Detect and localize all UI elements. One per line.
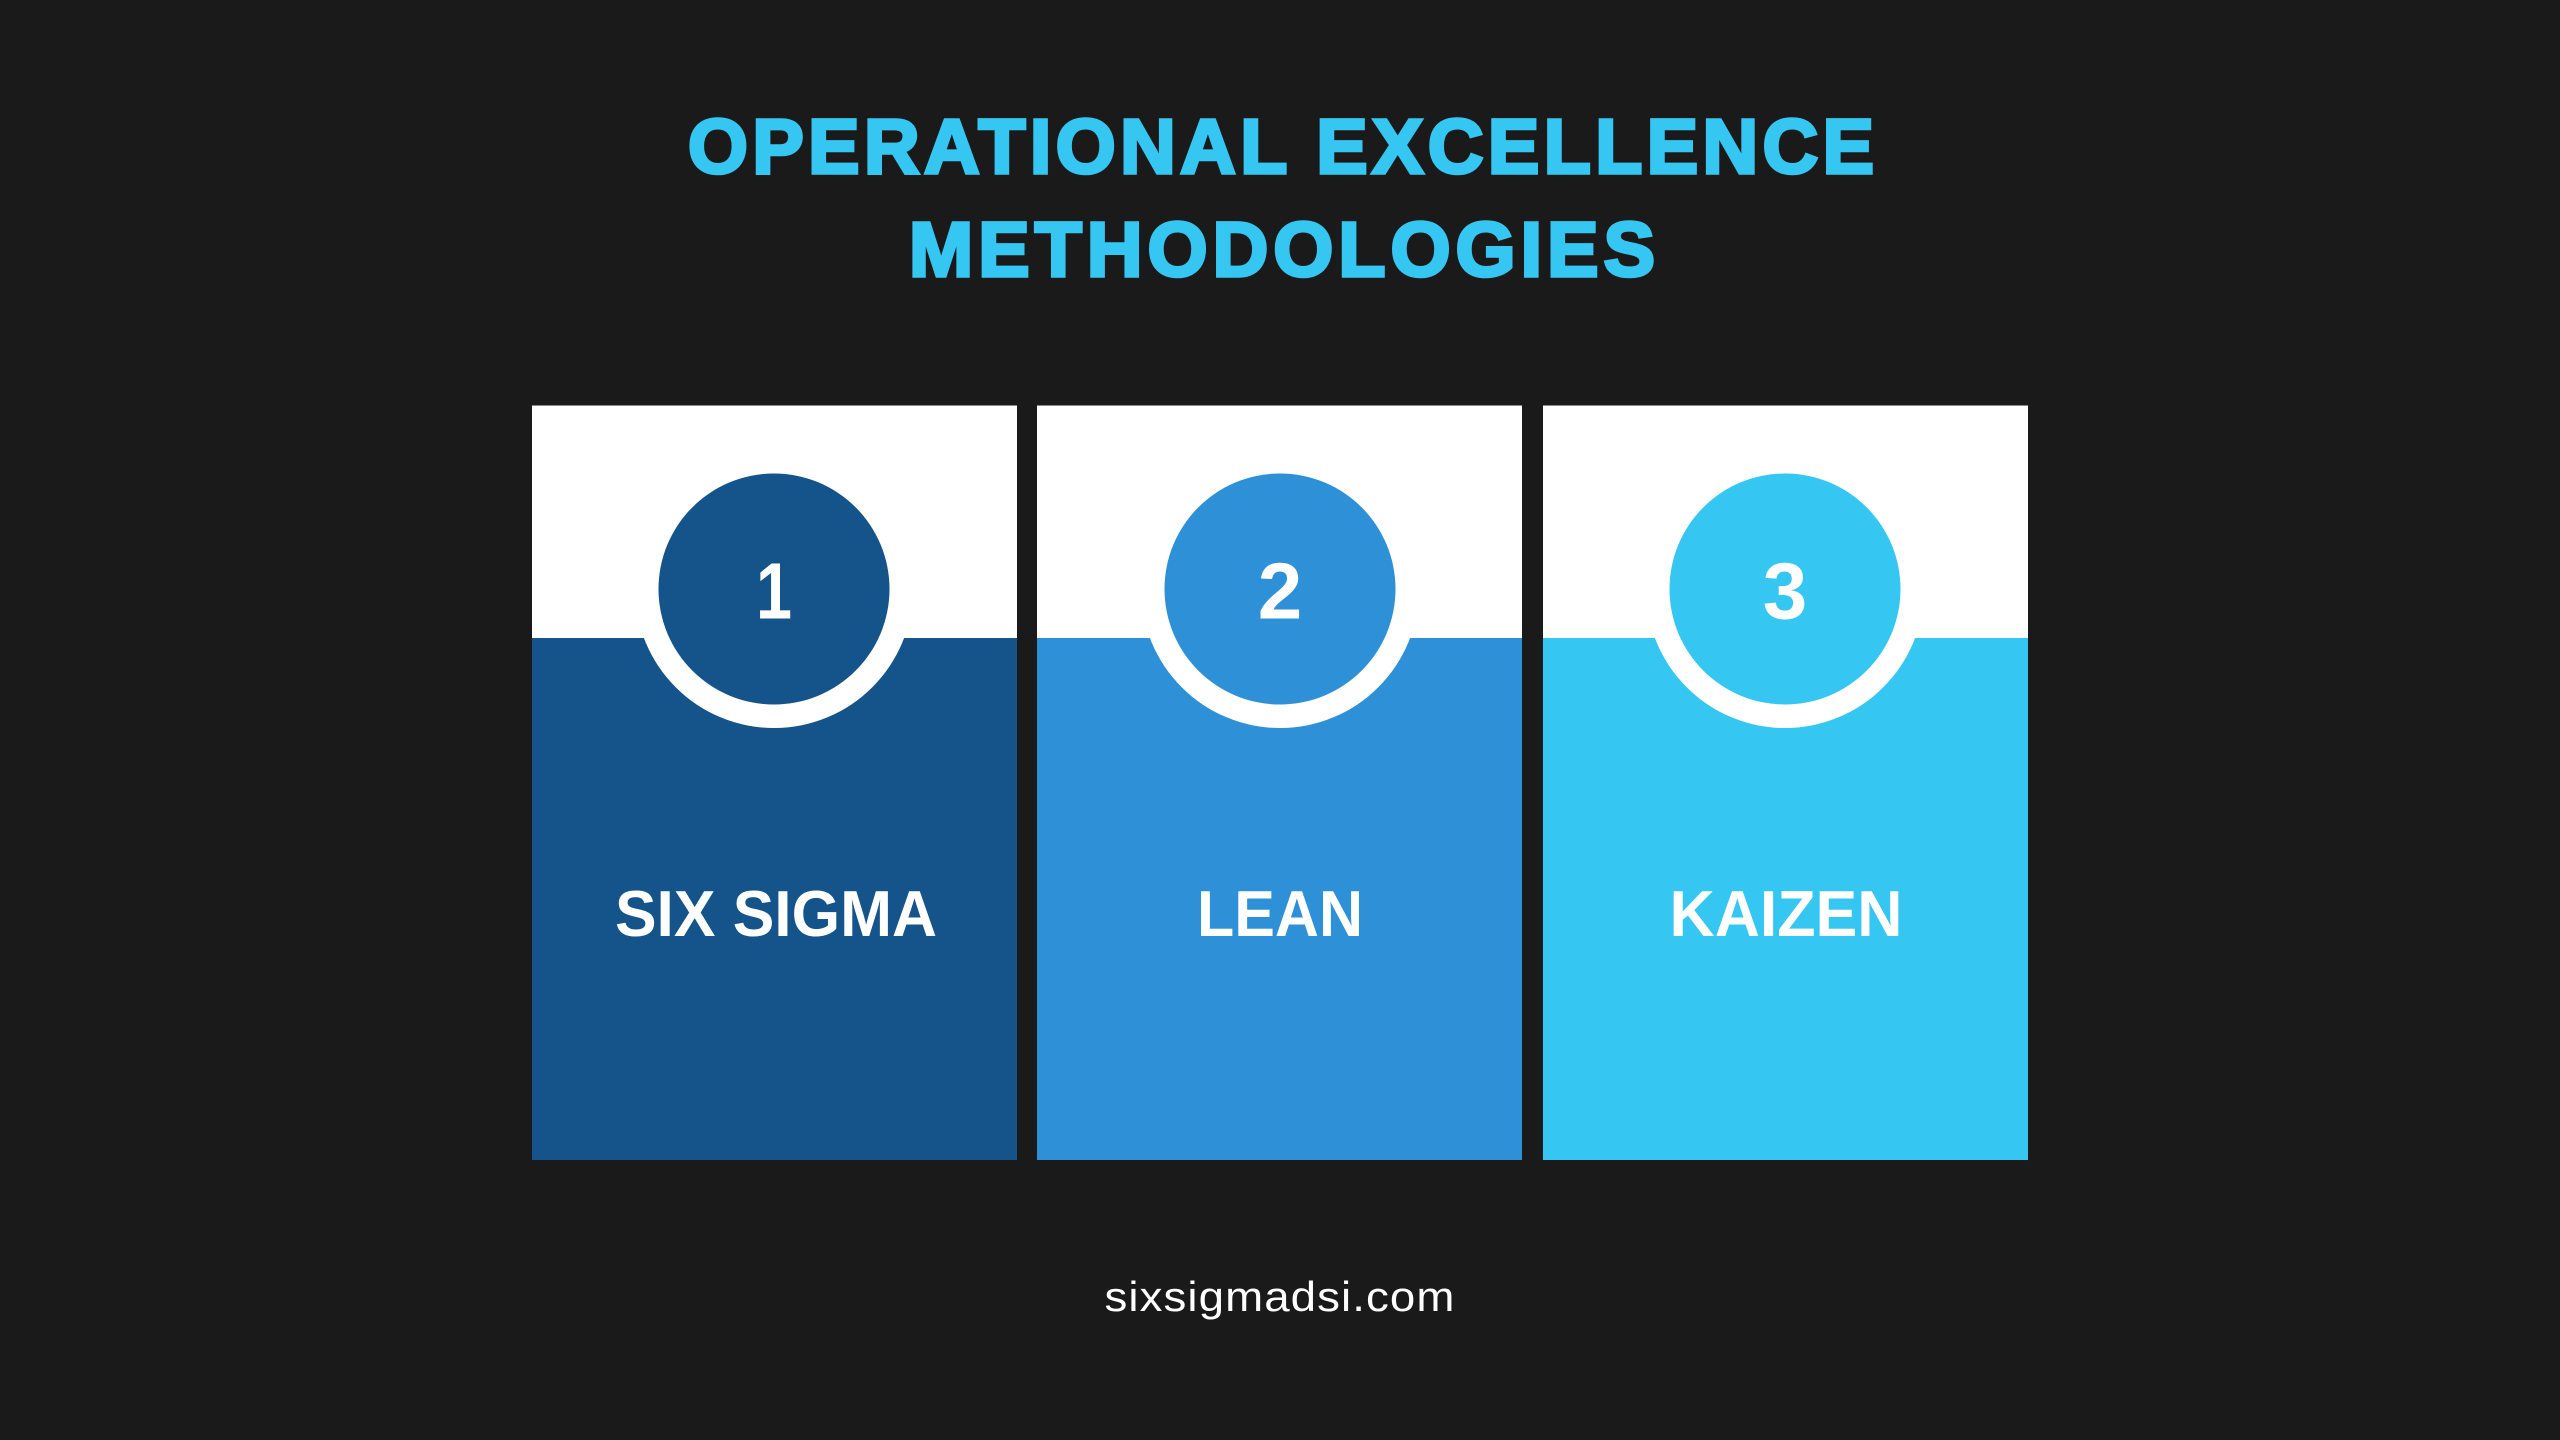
label: kaizen: KAIZEN xyxy=(1670,877,1902,950)
label: lean: LEAN xyxy=(1197,877,1363,950)
label: six sigma: SIX SIGMA xyxy=(615,877,937,950)
title: METHODOLOGIES xyxy=(909,207,1655,293)
badge: number 3 xyxy=(1645,450,1925,728)
panel: six sigma xyxy=(532,406,1017,1160)
panel: lean xyxy=(1037,406,1522,1160)
panel: kaizen xyxy=(1543,406,2028,1160)
badge: number 1 xyxy=(634,450,914,728)
title xyxy=(688,104,1874,293)
footer website: sixsigmadsi.com xyxy=(1104,1273,1456,1320)
badge: number 2: 2 xyxy=(1258,546,1302,636)
badge: number 1: 1 xyxy=(756,546,792,636)
badge: number 3: 3 xyxy=(1763,546,1807,636)
title: OPERATIONAL EXCELLENCE xyxy=(688,104,1874,190)
badge: number 2 xyxy=(1140,450,1420,728)
